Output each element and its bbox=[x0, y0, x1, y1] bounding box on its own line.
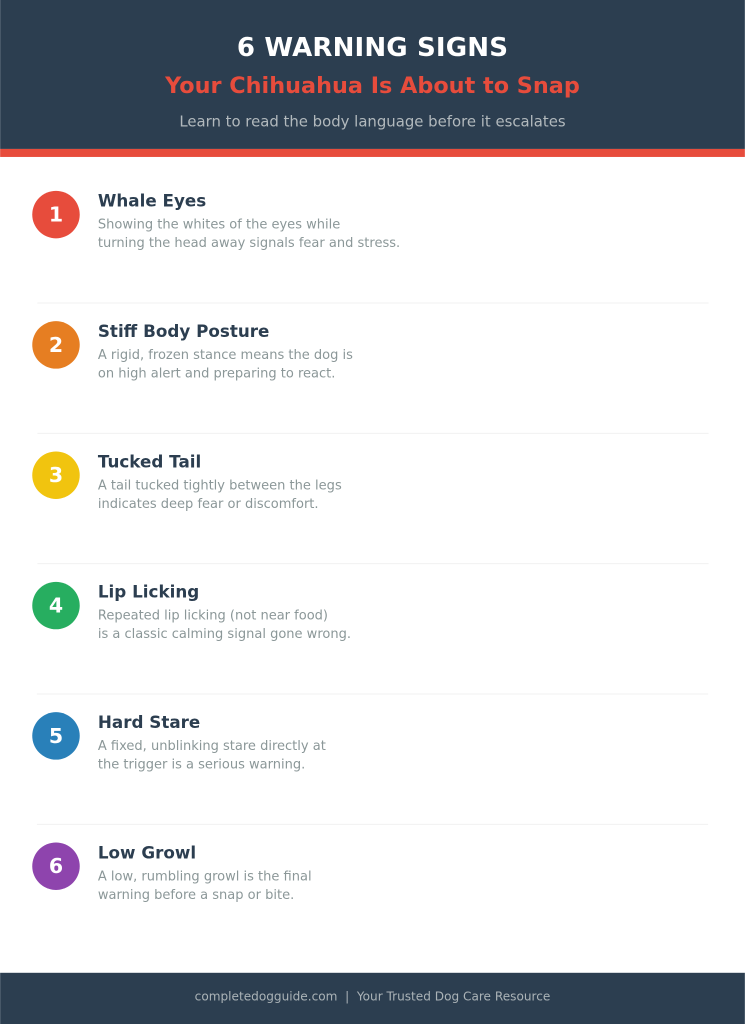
heading 2: Stiff Body Posture bbox=[98, 321, 269, 341]
number badge 4: 4 bbox=[49, 594, 63, 618]
heading 3: Tucked Tail bbox=[98, 451, 201, 471]
sign 2: stiff body posture bbox=[32, 321, 353, 382]
description 6: A low, rumbling growl is the final bbox=[98, 869, 312, 884]
heading 4: Lip Licking bbox=[98, 582, 199, 602]
title: 6 WARNING SIGNS bbox=[237, 33, 508, 63]
sign 5: hard stare bbox=[32, 712, 326, 773]
number badge 2: 2 bbox=[49, 333, 63, 357]
description 1: Showing the whites of the eyes while bbox=[98, 218, 340, 233]
description 2: A rigid, frozen stance means the dog is bbox=[98, 348, 353, 363]
description 4: is a classic calming signal gone wrong. bbox=[98, 627, 351, 642]
sign 6: low growl bbox=[32, 842, 312, 903]
number badge 1 bbox=[32, 191, 80, 238]
description 4: Repeated lip licking (not near food) bbox=[98, 609, 328, 624]
number badge 2 bbox=[32, 321, 80, 369]
number badge 3 bbox=[32, 451, 80, 499]
description 5: the trigger is a serious warning. bbox=[98, 758, 305, 773]
heading 5: Hard Stare bbox=[98, 712, 200, 732]
number badge 1: 1 bbox=[49, 203, 63, 227]
number badge 6: 6 bbox=[49, 854, 63, 878]
number badge 5: 5 bbox=[49, 724, 63, 748]
description 5: A fixed, unblinking stare directly at bbox=[98, 739, 326, 754]
description 3: indicates deep fear or discomfort. bbox=[98, 497, 319, 512]
number badge 3: 3 bbox=[49, 463, 63, 487]
number badge 4 bbox=[32, 582, 80, 629]
sign 1: whale eyes bbox=[32, 191, 400, 251]
number badge 5 bbox=[32, 712, 80, 760]
sign 4: lip licking bbox=[32, 582, 351, 642]
subtitle: Your Chihuahua Is About to Snap bbox=[164, 73, 580, 99]
heading 6: Low Growl bbox=[98, 842, 196, 862]
description 1: turning the head away signals fear and stress. bbox=[98, 236, 400, 251]
header banner bbox=[0, 0, 745, 157]
description 3: A tail tucked tightly between the legs bbox=[98, 478, 342, 493]
tagline: Learn to read the body language before it escalates bbox=[179, 113, 566, 131]
footer text: completedogguide.com | Your Trusted Dog Care Resource bbox=[195, 990, 550, 1004]
heading 1: Whale Eyes bbox=[98, 191, 206, 211]
footer bbox=[0, 973, 745, 1024]
sign 3: tucked tail bbox=[32, 451, 342, 512]
number badge 6 bbox=[32, 842, 80, 890]
description 2: on high alert and preparing to react. bbox=[98, 367, 335, 382]
description 6: warning before a snap or bite. bbox=[98, 888, 294, 903]
